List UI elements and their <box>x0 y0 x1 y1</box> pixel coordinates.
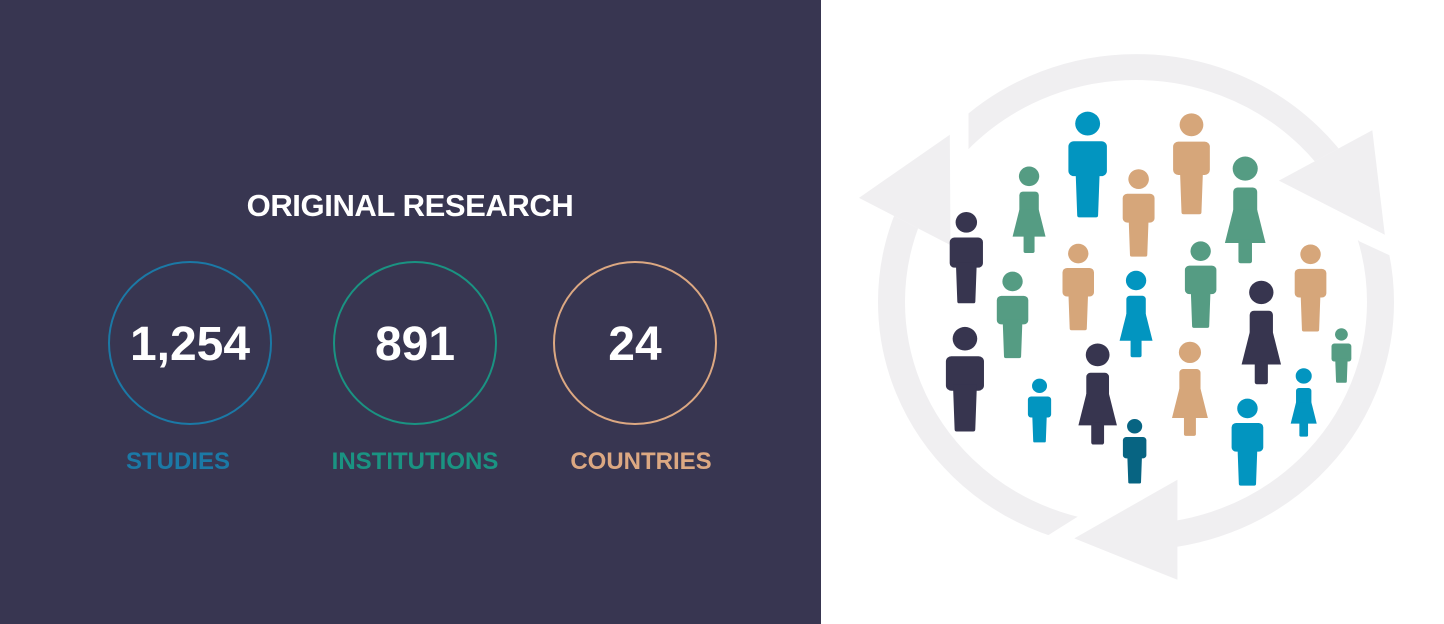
stat: institutions circle <box>333 261 497 425</box>
stat: studies circle <box>108 261 272 425</box>
people figures <box>946 112 1351 486</box>
number: studies: 1,254 <box>130 318 250 371</box>
label: studies: STUDIES <box>126 448 230 475</box>
label: institutions: INSTITUTIONS <box>332 448 498 475</box>
panel: left stats <box>0 0 821 624</box>
title: ORIGINAL RESEARCH <box>247 188 573 223</box>
number: countries: 24 <box>608 318 662 371</box>
label: countries: COUNTRIES <box>570 448 712 475</box>
number: institutions: 891 <box>375 318 455 371</box>
stat: countries circle <box>553 261 717 425</box>
cycle arrows <box>840 41 1440 598</box>
